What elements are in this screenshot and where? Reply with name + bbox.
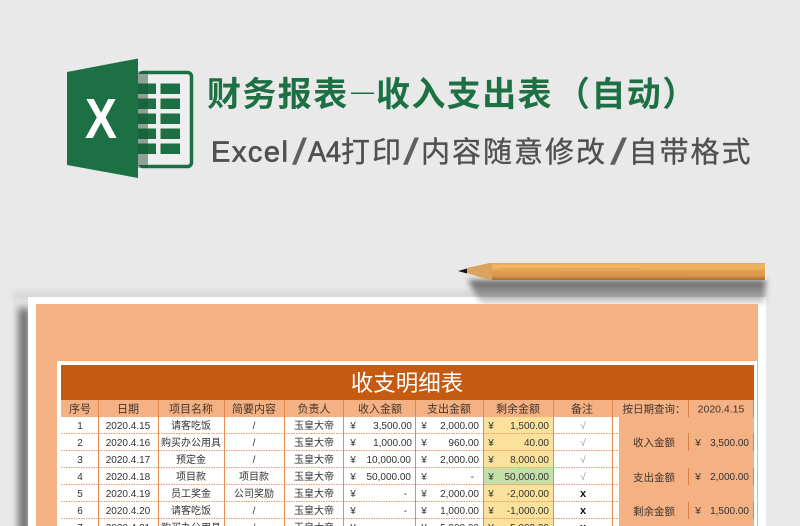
table header row: 序号 — [69, 402, 91, 416]
title: （自动） — [556, 76, 698, 114]
row 1: 2,000.00 — [440, 421, 479, 432]
subtitle: 打印 — [341, 136, 403, 169]
row 4: 50,000.00 — [504, 472, 549, 483]
subtitle: / — [610, 132, 628, 172]
row 6: 1,000.00 — [440, 506, 479, 517]
row 4: ¥ — [349, 472, 356, 483]
row 6 — [77, 504, 587, 517]
row 2: 玉皇大帝 — [294, 436, 334, 449]
row 6: - — [404, 506, 407, 517]
table grid lines — [61, 400, 619, 526]
row 3: 8,000.00 — [510, 455, 549, 466]
panel: paper sheet — [13, 291, 766, 526]
table header row: 简要内容 — [232, 402, 276, 416]
row 2: 960.00 — [448, 438, 479, 449]
income amount summary: 3,500.00 — [710, 438, 749, 449]
row 3: 10,000.00 — [366, 455, 411, 466]
date query row: 按日期查询： — [622, 402, 686, 416]
row 3: ¥ — [349, 455, 356, 466]
income amount summary — [633, 436, 749, 449]
expense amount summary — [633, 471, 749, 484]
date query row: 2020.4.15 — [698, 404, 745, 416]
row 3 — [77, 453, 586, 466]
row 4: 项目款 — [176, 470, 206, 483]
remaining amount summary: 1,500.00 — [710, 506, 749, 517]
row 3: 2020.4.17 — [106, 455, 151, 466]
row 1: ¥ — [420, 421, 427, 432]
row 4: 4 — [77, 472, 83, 483]
date query row — [622, 402, 745, 416]
table header row: 项目名称 — [169, 402, 213, 416]
row 4: √ — [580, 471, 586, 483]
row 3: 预定金 — [176, 453, 206, 466]
remaining amount summary — [633, 505, 749, 518]
row 6: 玉皇大帝 — [294, 504, 334, 517]
remaining amount summary: ¥ — [694, 505, 701, 517]
row 5: - — [404, 489, 407, 500]
row 1: 3,500.00 — [373, 421, 412, 432]
row 5: ¥ — [349, 489, 356, 500]
row 4: 项目款 — [239, 470, 269, 483]
icon: Excel logo — [67, 58, 192, 178]
row 3: ¥ — [487, 455, 494, 466]
expense amount summary: ¥ — [694, 471, 701, 483]
row 4: ¥ — [420, 472, 427, 483]
row 3: / — [253, 455, 256, 466]
row 4: 2020.4.18 — [106, 472, 151, 483]
row 6: x — [580, 505, 587, 517]
row 5: ¥ — [420, 489, 427, 500]
row 4 — [77, 470, 586, 483]
subtitle: A4 — [308, 136, 341, 168]
row 5: 玉皇大帝 — [294, 487, 334, 500]
subtitle: / — [292, 132, 308, 172]
row 1: 2020.4.15 — [106, 421, 151, 432]
row 1: 1,500.00 — [510, 421, 549, 432]
row 3: ¥ — [420, 455, 427, 466]
table title bar: 收支明细表 — [351, 371, 463, 396]
row 1: √ — [580, 420, 586, 432]
row 5: 5 — [77, 489, 83, 500]
row 3: 2,000.00 — [440, 455, 479, 466]
row 6: / — [253, 506, 256, 517]
table header row: 收入金额 — [358, 402, 402, 416]
row 6: 6 — [77, 506, 83, 517]
row 1: ¥ — [487, 421, 494, 432]
row 6: 2020.4.20 — [106, 506, 151, 517]
remaining amount summary: 剩余金额 — [633, 505, 675, 518]
subtitle: / — [403, 132, 420, 172]
row 2: 购买办公用具 — [161, 436, 221, 449]
table header row — [61, 400, 619, 417]
row 2: ¥ — [420, 438, 427, 449]
row 5: 公司奖励 — [234, 487, 274, 500]
title: 财务报表 — [207, 76, 349, 114]
table header row: 日期 — [117, 402, 139, 416]
title: — — [351, 78, 374, 104]
row 5: 员工奖金 — [171, 487, 211, 500]
table header row: 负责人 — [298, 402, 330, 416]
table header row: 备注 — [571, 402, 593, 416]
table rows — [77, 419, 587, 526]
income amount summary: 收入金额 — [633, 436, 675, 449]
row 5 — [77, 487, 587, 500]
expense amount summary: 支出金额 — [633, 471, 675, 484]
row 1: / — [253, 421, 256, 432]
panel: orange sheet background — [36, 304, 758, 526]
subtitle: 自带格式 — [628, 136, 753, 169]
row 1 — [77, 419, 586, 432]
row 1: 玉皇大帝 — [294, 419, 334, 432]
row 5: 2020.4.19 — [106, 489, 151, 500]
row 6: ¥ — [349, 506, 356, 517]
income amount summary: ¥ — [694, 437, 701, 449]
table header row: 支出金额 — [427, 402, 471, 416]
row 2: 1,000.00 — [373, 438, 412, 449]
panel: income and expense table — [57, 361, 757, 526]
subtitle: 内容随意修改 — [421, 136, 607, 169]
icon: pencil — [458, 263, 766, 304]
icon: Excel logo: X — [85, 87, 117, 151]
subtitle — [211, 132, 753, 172]
row 6: 请客吃饭 — [171, 504, 211, 517]
row 4: ¥ — [487, 472, 494, 483]
row 1: 1 — [77, 421, 83, 432]
row 4: 50,000.00 — [366, 472, 411, 483]
row 1: ¥ — [349, 421, 356, 432]
row 5: x — [580, 488, 587, 500]
row 5: ¥ — [487, 489, 494, 500]
row 2: 2020.4.16 — [106, 438, 151, 449]
row 2: / — [253, 438, 256, 449]
remaining amount column highlight — [483, 417, 553, 526]
row 6: ¥ — [420, 506, 427, 517]
panel: date query summary — [619, 400, 754, 526]
row 5: -2,000.00 — [507, 489, 549, 500]
row 6: ¥ — [487, 506, 494, 517]
row 4: 玉皇大帝 — [294, 470, 334, 483]
row 2: 2 — [77, 438, 83, 449]
table title bar — [61, 365, 754, 400]
row 5: 2,000.00 — [440, 489, 479, 500]
row 3: 玉皇大帝 — [294, 453, 334, 466]
expense amount summary: 2,000.00 — [710, 472, 749, 483]
table header row: 剩余金额 — [496, 402, 540, 416]
row 7 — [77, 521, 587, 526]
row 2 — [77, 436, 586, 449]
row 3: 3 — [77, 455, 83, 466]
row 4: - — [471, 472, 474, 483]
row 6: -1,000.00 — [507, 506, 549, 517]
row 2: ¥ — [349, 438, 356, 449]
row 2: 40.00 — [524, 438, 549, 449]
subtitle: Excel — [211, 136, 288, 168]
row 2: √ — [580, 437, 586, 449]
row 2: ¥ — [487, 438, 494, 449]
row 3: √ — [580, 454, 586, 466]
title: 收入支出表 — [376, 76, 553, 114]
row 1: 请客吃饭 — [171, 419, 211, 432]
title — [207, 76, 698, 114]
